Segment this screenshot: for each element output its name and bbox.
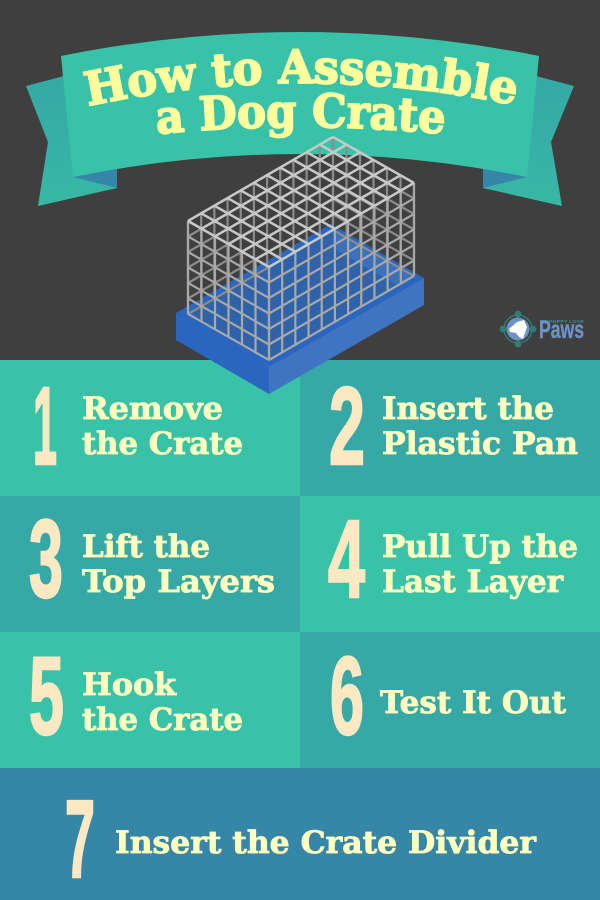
- step 3 text: Top Layers: [82, 564, 275, 600]
- illustration: dog crate: [176, 137, 424, 394]
- title text: How to Assemble: [82, 48, 516, 106]
- panel: step 5: [0, 632, 300, 768]
- crate plastic base: [176, 224, 424, 394]
- step 1 text: [82, 391, 243, 462]
- step 4 text: [382, 529, 578, 600]
- step 4 text: Last Layer: [382, 564, 564, 600]
- panel: step 1: [0, 360, 300, 496]
- panel: step 2: [300, 360, 600, 496]
- title text line 2: a Dog Crate: [157, 92, 444, 138]
- logo paw ring: [500, 311, 536, 347]
- panel: step 4: [300, 496, 600, 632]
- logo small text: PUPPY LOVE: [549, 319, 584, 324]
- number 6: 6: [330, 635, 364, 758]
- banner right tail: [483, 76, 574, 206]
- panel: step 7: [0, 768, 600, 900]
- step 3 text: [82, 529, 275, 600]
- step 4 text: Pull Up the: [382, 529, 578, 565]
- step 1 text: Remove: [82, 391, 223, 427]
- step 5 text: [82, 667, 243, 738]
- crate wire front walls: [188, 183, 414, 360]
- logo: [500, 311, 584, 347]
- step 1 text: the Crate: [82, 426, 243, 462]
- number 3: 3: [29, 498, 63, 621]
- step 2 text: Insert the: [382, 391, 554, 427]
- crate wire top: [188, 137, 414, 267]
- step 5 text: Hook: [82, 667, 178, 703]
- title banner: [26, 32, 574, 206]
- number 4: 4: [328, 498, 365, 621]
- step 7 text: Insert the Crate Divider: [115, 825, 537, 861]
- panel: step 7: 7: [65, 778, 95, 900]
- panel: step 1: 1: [33, 365, 57, 488]
- panel: step 6: [300, 632, 600, 768]
- banner main ribbon: [61, 32, 539, 177]
- step 3 text: Lift the: [82, 529, 210, 565]
- banner left tail: [26, 76, 117, 206]
- number 5: 5: [29, 635, 64, 758]
- crate wire back walls: [188, 137, 414, 314]
- panel: step 3: [0, 496, 300, 632]
- step 6 text: Test It Out: [380, 685, 567, 721]
- step 2 text: Plastic Pan: [382, 426, 578, 462]
- step 2 text: [382, 391, 578, 462]
- number 2: 2: [329, 365, 365, 488]
- step 5 text: the Crate: [82, 702, 243, 738]
